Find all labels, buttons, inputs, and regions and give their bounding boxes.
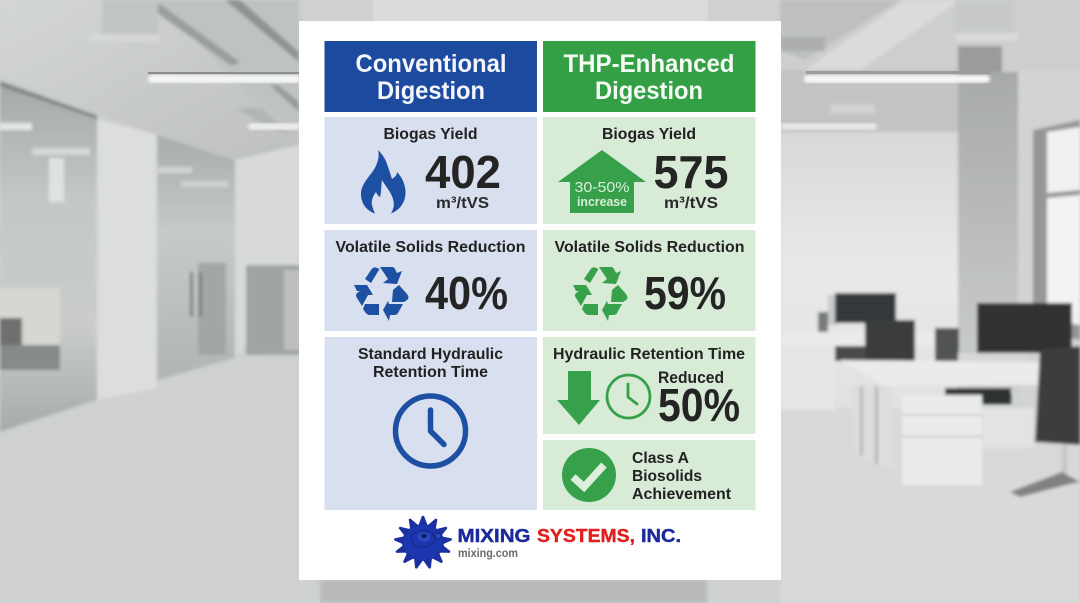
icon: blue clock <box>396 396 466 466</box>
icon: up arrow with 30-50% increase: increase <box>577 195 627 209</box>
value: 40%: 40% <box>425 267 508 319</box>
panel: conventional volatile solids reduction: Volatile Solids Reduction <box>336 239 526 256</box>
value: 402 m3/tVS: m³/tVS <box>436 195 489 212</box>
icon: green clock <box>607 375 650 418</box>
icon: up arrow with 30-50% increase: 30-50% <box>574 179 630 196</box>
icon: down arrow <box>557 371 600 425</box>
panel: THP biogas yield: Biogas Yield <box>602 126 696 143</box>
value: 575 m3/tVS: m³/tVS <box>664 195 718 212</box>
header: conventional digestion <box>324 41 537 112</box>
value: 402 m3/tVS: 402 <box>425 146 501 198</box>
text: class A biosolids achievement: Class A <box>632 450 689 467</box>
icon: up arrow with 30-50% increase <box>558 150 646 213</box>
white infographic card <box>299 21 781 580</box>
text: class A biosolids achievement: Achievement <box>632 486 732 503</box>
panel: standard hydraulic retention time: Retention Time <box>373 364 488 381</box>
panel: standard hydraulic retention time: Standard Hydraulic <box>358 346 503 363</box>
icon: blue flame <box>361 150 406 214</box>
value: reduced 50%: Reduced <box>658 368 724 387</box>
icon: blue gear <box>394 516 452 569</box>
header: conventional digestion: Digestion <box>377 77 485 105</box>
panel: conventional biogas yield <box>324 117 537 224</box>
panel: conventional biogas yield: Biogas Yield <box>384 126 478 143</box>
panel: class A biosolids achievement <box>543 440 756 510</box>
text: class A biosolids achievement <box>632 450 732 503</box>
panel: THP volatile solids reduction <box>543 230 756 331</box>
value: 575 m3/tVS: 575 <box>654 146 728 198</box>
logo: Mixing Systems, Inc. <box>394 516 681 569</box>
header: conventional digestion: Conventional <box>356 50 506 78</box>
wordmark: INC. <box>641 525 681 546</box>
wordmark <box>458 525 681 546</box>
value: 59%: 59% <box>644 267 726 319</box>
header: THP-enhanced digestion: Digestion <box>595 77 703 105</box>
website: mixing.com <box>458 546 518 560</box>
wordmark: MIXING <box>458 525 530 546</box>
panel: THP hydraulic retention time: Hydraulic Retention Time <box>553 346 745 363</box>
icon: green recycle <box>573 267 628 321</box>
panel: conventional volatile solids reduction <box>324 230 537 331</box>
value: reduced 50%: 50% <box>658 379 740 431</box>
header: THP-enhanced digestion: THP-Enhanced <box>564 50 734 78</box>
icon: blue recycle <box>354 267 408 321</box>
text: class A biosolids achievement: Biosolids <box>632 468 702 485</box>
panel: standard hydraulic retention time <box>324 337 537 510</box>
icon: check circle <box>562 448 616 502</box>
panel: THP biogas yield <box>543 117 756 224</box>
wordmark: SYSTEMS, <box>537 525 635 546</box>
panel: THP hydraulic retention time <box>543 337 756 434</box>
header: THP-enhanced digestion <box>543 41 756 112</box>
panel: THP volatile solids reduction: Volatile Solids Reduction <box>554 239 744 256</box>
